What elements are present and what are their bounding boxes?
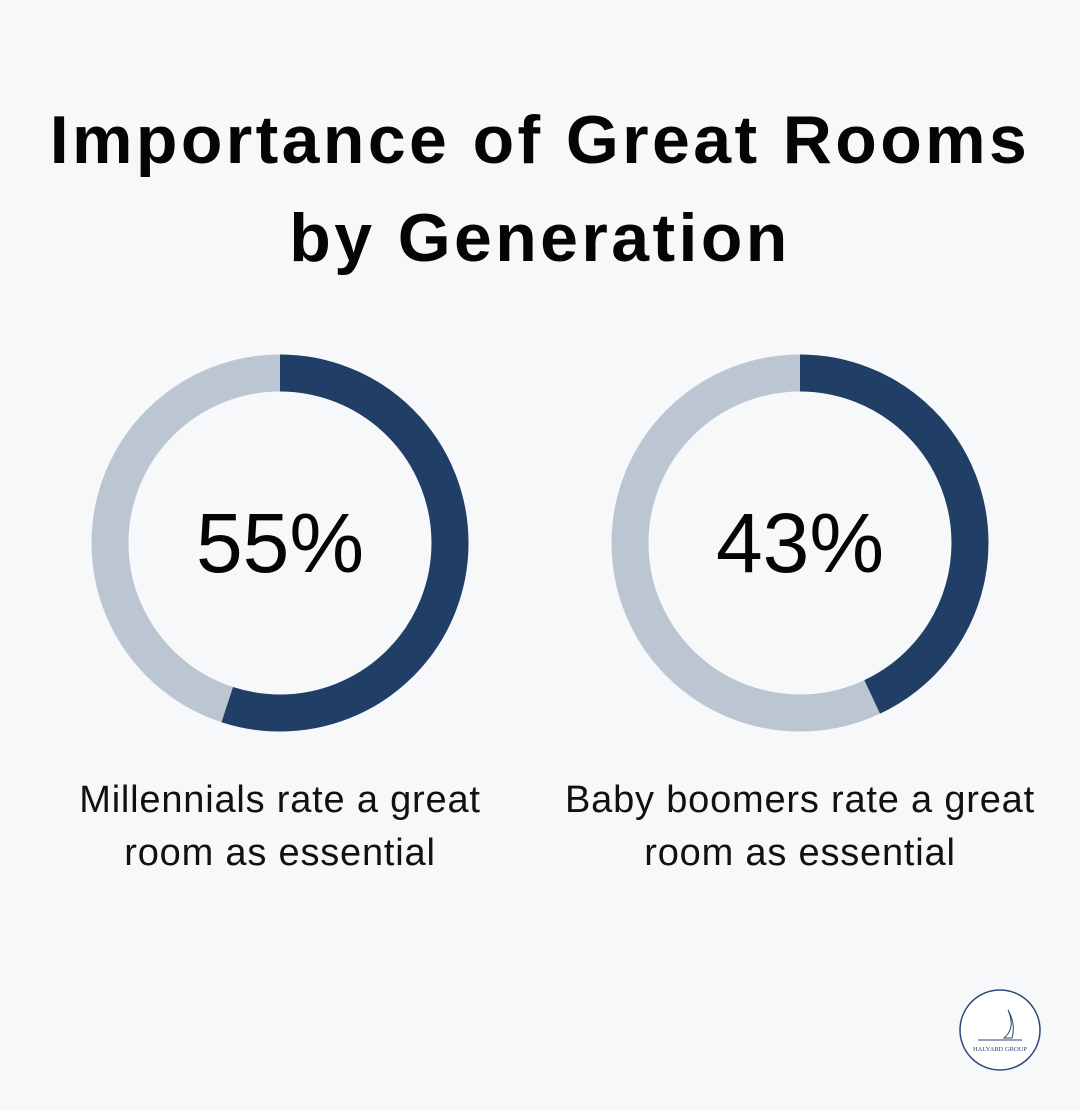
title: by Generation xyxy=(289,200,791,276)
donut chart: baby boomers 43%: 43% xyxy=(716,496,884,590)
label: baby boomers xyxy=(565,779,1035,874)
label: millennials: room as essential xyxy=(124,832,436,874)
label: millennials: Millennials rate a great xyxy=(79,779,481,821)
donut chart: millennials 55%: 55% xyxy=(196,496,364,590)
donut chart: millennials 55% xyxy=(92,354,468,732)
donut chart: baby boomers 43% xyxy=(612,354,988,732)
logo: halyard group xyxy=(959,989,1041,1071)
label: baby boomers: Baby boomers rate a great xyxy=(565,779,1035,821)
logo: halyard group: HALYARD GROUP xyxy=(973,1046,1027,1053)
label: millennials xyxy=(79,779,481,874)
title: Importance of Great Rooms xyxy=(50,102,1030,178)
title xyxy=(50,102,1030,276)
label: baby boomers: room as essential xyxy=(644,832,956,874)
